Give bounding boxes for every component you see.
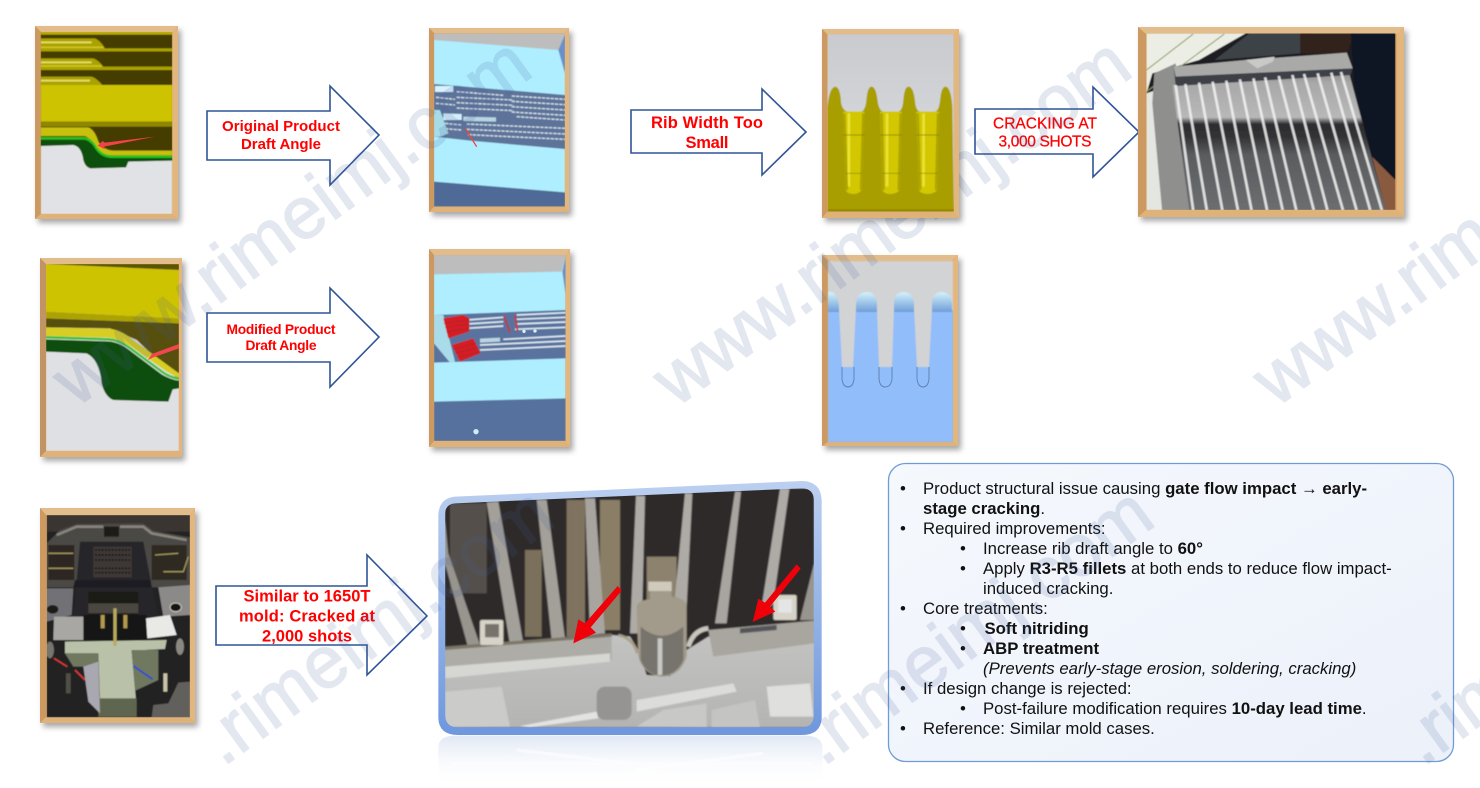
arrow: Modified Product Draft Angle: Modified Product: [226, 322, 336, 337]
list: issue: Soft nitriding: [984, 619, 1089, 638]
list: issue: •: [960, 539, 966, 558]
arrow: Rib Width Too Small: Rib Width Too: [651, 114, 763, 132]
list: issue: induced cracking.: [983, 579, 1113, 598]
list: issue: Reference: Similar mold cases.: [923, 719, 1155, 738]
list: issue: •: [960, 559, 966, 578]
icon: right red arrow: [753, 564, 801, 622]
watermark: repeated site URL: .rimeimj.com: [185, 471, 567, 780]
arrow: Original Product Draft Angle: Draft Angle: [241, 136, 321, 153]
image frame: blue rib cavity CAD view: [822, 255, 958, 446]
list: issue: (Prevents early-stage erosion, soldering, cracking): [983, 659, 1356, 678]
panel: summary notes: [888, 464, 1454, 762]
list: issue: Core treatments:: [923, 599, 1048, 618]
list: issue: •: [960, 699, 966, 718]
arrow: Original Product Draft Angle: Original Product: [222, 118, 340, 135]
arrow: Similar to 1650T mold cracked at 2,000 shots: Similar to 1650T: [244, 588, 370, 606]
photo: cracked ribs with red arrows and reflection: [438, 481, 822, 787]
list: issue: •: [960, 619, 966, 638]
blue rib fingertips: [828, 292, 952, 312]
list: issue: If design change is rejected:: [923, 679, 1132, 698]
list: issue: ABP treatment: [983, 639, 1099, 658]
watermark: repeated site URL: www.rimeimj.com: [37, 22, 545, 422]
arrow: Cracking at 3,000 shots: 3,000 SHOTS: [998, 134, 1092, 150]
image frame: modified product draft angle CAD view: [40, 258, 182, 457]
image frame: modified cavity CAD view with red highlighted ribs: [429, 249, 570, 447]
arrow: Similar to 1650T mold cracked at 2,000 shots: mold: Cracked at: [239, 608, 376, 626]
list: issue: •: [900, 479, 906, 498]
watermark: repeated site URL: .rimeimj.com: [785, 471, 1167, 780]
image frame: photo of mold in press: [40, 508, 195, 723]
icon: left red arrow: [573, 586, 622, 643]
icon: red pointer arrow: [98, 137, 155, 149]
arrow: Rib Width Too Small: [631, 89, 806, 175]
list: issue: Post-failure modification requires 10-day lead time.: [983, 699, 1367, 718]
list: issue: •: [900, 519, 906, 538]
arrow: Cracking at 3,000 shots: [975, 87, 1139, 177]
arrow: Similar to 1650T mold cracked at 2,000 shots: [216, 555, 427, 675]
arrow: Cracking at 3,000 shots: CRACKING AT: [993, 116, 1098, 132]
arrow: Modified Product Draft Angle: Draft Angle: [246, 338, 317, 353]
list: issue: •: [900, 719, 906, 738]
image frame: original product draft angle CAD view: [35, 26, 178, 219]
list: issue: •: [900, 679, 906, 698]
icon: small red pointer: [466, 129, 477, 147]
list: issue: [900, 479, 1392, 738]
arrow: Similar to 1650T mold cracked at 2,000 shots: 2,000 shots: [262, 628, 352, 646]
list: issue: •: [960, 639, 966, 658]
list: issue: Product structural issue causing gate flow impact → early-: [923, 479, 1367, 498]
arrow: Modified Product Draft Angle: [207, 288, 379, 387]
image frame: photo of cracked heat-sink casting: [1138, 27, 1404, 217]
image frame: original cavity CAD view with ribs: [429, 28, 569, 212]
arrow: Rib Width Too Small: Small: [686, 134, 728, 152]
image frame: rib width yellow CAD view: [822, 29, 959, 218]
list: issue: •: [900, 599, 906, 618]
list: issue: Required improvements:: [923, 519, 1105, 538]
watermark: repeated site URL: www.rimeimj.com: [637, 22, 1145, 422]
reflection of photo: [438, 736, 822, 787]
list: issue: Apply R3-R5 fillets at both ends to reduce flow impact-: [983, 559, 1392, 578]
arrow: Original Product Draft Angle: [207, 86, 379, 185]
list: issue: stage cracking.: [923, 499, 1045, 518]
icon: red pointer arrow: [148, 344, 179, 360]
list: issue: Increase rib draft angle to 60°: [983, 539, 1203, 558]
